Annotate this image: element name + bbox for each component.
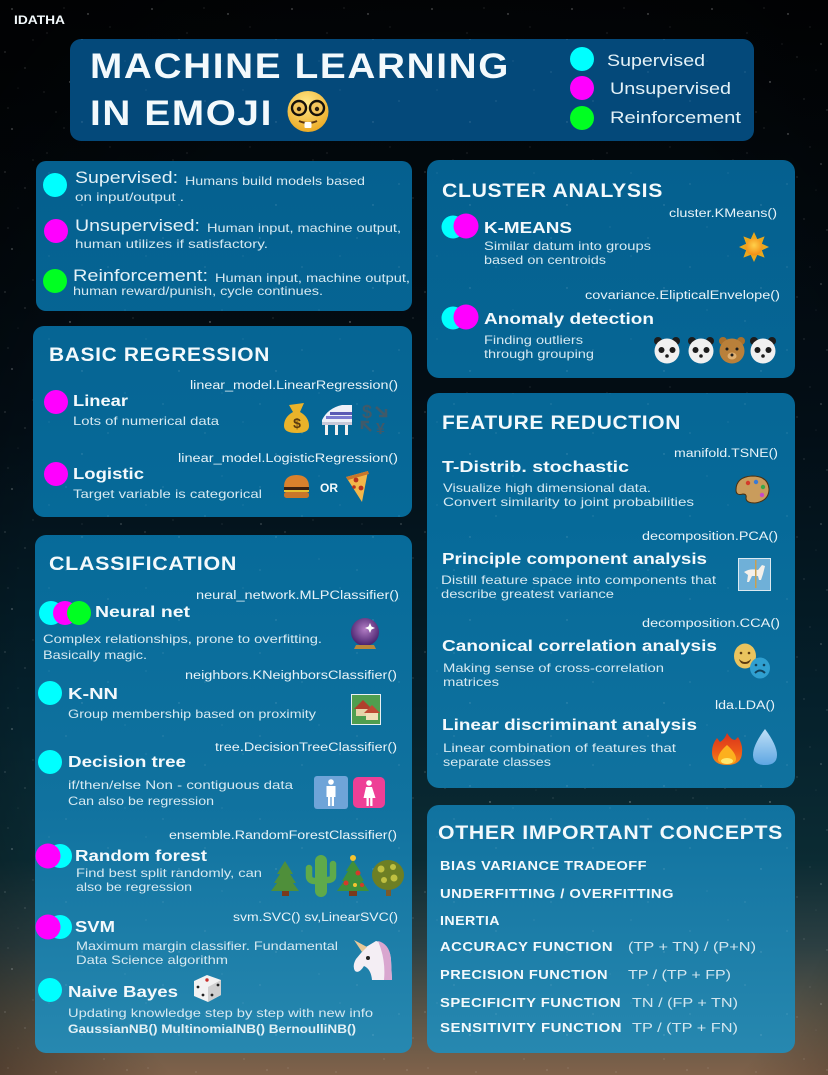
logistic model: linear_model.LogisticRegression() <box>178 453 398 465</box>
or label: OR <box>320 481 338 495</box>
supervised definition: Supervised: <box>75 169 178 187</box>
reinforcement definition: Human input, machine output, <box>215 271 410 285</box>
icon: panda <box>750 337 776 364</box>
icon: man sign <box>314 776 348 809</box>
concept list: SPECIFICITY FUNCTION <box>440 996 621 1010</box>
lda: Linear combination of features that <box>443 741 677 755</box>
lda <box>442 700 775 769</box>
k-nn: K-NN <box>68 686 118 703</box>
icon: nerd face <box>288 91 328 132</box>
icon: currency exchange: ¥ <box>376 421 385 438</box>
decision tree: Decision tree <box>68 754 186 771</box>
icon: fire <box>712 733 742 765</box>
panel: title banner <box>70 39 754 141</box>
panel: basic regression <box>33 326 412 517</box>
panel: feature reduction <box>427 393 795 788</box>
logistic model <box>44 453 398 501</box>
icon: panda <box>688 337 714 364</box>
icon: currency exchange: $ <box>362 402 372 422</box>
linear model: Linear <box>73 393 128 410</box>
decision tree: if/then/else Non - contiguous data <box>68 778 293 792</box>
icon: deciduous tree <box>372 860 404 896</box>
icon: train <box>322 405 352 435</box>
icon: palette <box>736 476 769 503</box>
heading: BASIC REGRESSION <box>49 345 270 366</box>
supervised definition <box>43 169 365 204</box>
panel: learning types <box>36 161 412 311</box>
panel: classification <box>35 535 412 1053</box>
concept list: PRECISION FUNCTION <box>440 968 608 982</box>
random forest: ensemble.RandomForestClassifier() <box>169 830 397 842</box>
pca: Principle component analysis <box>442 551 707 568</box>
concept list: BIAS VARIANCE TRADEOFF <box>440 859 647 873</box>
random forest: Find best split randomly, can <box>76 866 262 880</box>
anomaly detection <box>442 290 780 361</box>
naive bayes: GaussianNB() MultinomialNB() BernoulliNB() <box>68 1022 356 1036</box>
lda: lda.LDA() <box>715 700 775 712</box>
logistic model: Target variable is categorical <box>73 487 262 501</box>
concept list: TP / (TP + FN) <box>632 1020 738 1035</box>
icon: pizza <box>346 471 369 502</box>
decision tree: tree.DecisionTreeClassifier() <box>215 742 397 754</box>
anomaly detection: Anomaly detection <box>484 311 654 328</box>
heading: CLASSIFICATION <box>49 554 237 575</box>
neural net: Complex relationships, prone to overfitting. <box>43 632 322 646</box>
unsupervised definition: Unsupervised: <box>75 217 200 235</box>
lda: separate classes <box>443 755 551 769</box>
lda: Linear discriminant analysis <box>442 717 697 734</box>
naive bayes: Updating knowledge step by step with new info <box>68 1006 373 1020</box>
k-nn <box>38 670 397 721</box>
icon: unicorn <box>354 940 392 980</box>
k-means: K-MEANS <box>484 220 572 237</box>
pca: Distill feature space into components that <box>441 573 717 587</box>
icon: carousel horse <box>738 558 770 590</box>
icon: houses <box>352 694 380 724</box>
legend: Reinforcement <box>610 109 741 127</box>
k-means <box>442 208 777 267</box>
linear model: linear_model.LinearRegression() <box>190 380 398 392</box>
svm: svm.SVC() sv,LinearSVC() <box>233 912 398 924</box>
neural net <box>39 590 399 662</box>
linear model: Lots of numerical data <box>73 414 219 428</box>
k-means: Similar datum into groups <box>484 239 651 253</box>
reinforcement definition <box>43 267 410 298</box>
supervised definition: Humans build models based <box>185 174 365 188</box>
concept list: INERTIA <box>440 914 500 928</box>
icon: currency exchange <box>362 402 386 438</box>
neural net: Neural net <box>95 604 191 621</box>
neural net: Basically magic. <box>43 648 147 662</box>
t-sne: Visualize high dimensional data. <box>443 481 651 495</box>
svm: Data Science algorithm <box>76 953 228 967</box>
random forest: also be regression <box>76 880 192 894</box>
concept list <box>440 859 756 1035</box>
icon: burger <box>284 475 309 498</box>
random forest: Random forest <box>75 848 208 865</box>
icon: bear <box>719 337 745 364</box>
anomaly detection: through grouping <box>484 347 594 361</box>
icon: money bag <box>284 403 309 433</box>
icon: panda <box>654 337 680 364</box>
legend: Supervised <box>607 52 705 70</box>
legend: Unsupervised <box>610 80 731 98</box>
cca: Canonical correlation analysis <box>442 638 717 655</box>
reinforcement definition: Reinforcement: <box>73 267 208 285</box>
concept list: TN / (FP + TN) <box>632 995 738 1010</box>
panel: cluster analysis <box>427 160 795 378</box>
icon: woman sign <box>353 777 385 808</box>
reinforcement definition: human reward/punish, cycle continues. <box>73 284 323 298</box>
logistic model: Logistic <box>73 466 144 483</box>
t-sne: Convert similarity to joint probabilities <box>443 495 694 509</box>
decision tree <box>38 742 397 808</box>
supervised definition: on input/output . <box>75 190 184 204</box>
icon: water drop <box>753 729 777 765</box>
unsupervised definition: human utilizes if satisfactory. <box>75 237 268 251</box>
icon: christmas tree <box>337 855 369 896</box>
t-sne <box>442 448 778 509</box>
legend <box>570 47 741 130</box>
naive bayes: Naive Bayes <box>68 984 178 1001</box>
concept list: ACCURACY FUNCTION <box>440 940 613 954</box>
concept list: SENSITIVITY FUNCTION <box>440 1021 622 1035</box>
icon: money bag: $ <box>293 415 301 431</box>
pca: decomposition.PCA() <box>642 531 778 543</box>
heading: CLUSTER ANALYSIS <box>442 181 663 202</box>
icon: dice <box>194 975 221 1002</box>
icon: theatre masks <box>734 644 770 678</box>
random forest <box>36 830 397 894</box>
concept list: UNDERFITTING / OVERFITTING <box>440 887 674 901</box>
pca: describe greatest variance <box>441 587 614 601</box>
svm: SVM <box>75 919 115 936</box>
cca: decomposition.CCA() <box>642 618 780 630</box>
title: IN EMOJI <box>90 94 273 133</box>
panel: other important concepts <box>427 805 795 1053</box>
unsupervised definition: Human input, machine output, <box>207 221 401 235</box>
cca: matrices <box>443 675 499 689</box>
cca: Making sense of cross-correlation <box>443 661 664 675</box>
linear model <box>44 380 398 428</box>
decision tree: Can also be regression <box>68 794 214 808</box>
heading: FEATURE REDUCTION <box>442 413 681 434</box>
title: MACHINE LEARNING <box>90 47 510 86</box>
anomaly detection: Finding outliers <box>484 333 583 347</box>
brand label: IDATHA <box>14 13 65 27</box>
naive bayes <box>38 978 373 1036</box>
t-sne: T-Distrib. stochastic <box>442 459 629 476</box>
concept list: TP / (TP + FP) <box>628 967 731 982</box>
concept list: (TP + TN) / (P+N) <box>628 939 756 954</box>
k-nn: neighbors.KNeighborsClassifier() <box>185 670 397 682</box>
icon: crystal ball <box>351 618 379 649</box>
cca <box>442 618 780 689</box>
anomaly detection: covariance.ElipticalEnvelope() <box>585 290 780 302</box>
neural net: neural_network.MLPClassifier() <box>196 590 399 602</box>
svm: Maximum margin classifier. Fundamental <box>76 939 338 953</box>
title <box>90 47 510 133</box>
k-nn: Group membership based on proximity <box>68 707 316 721</box>
k-means: cluster.KMeans() <box>669 208 777 220</box>
unsupervised definition <box>44 217 401 251</box>
k-means: based on centroids <box>484 253 606 267</box>
svm <box>36 912 398 967</box>
heading: OTHER IMPORTANT CONCEPTS <box>438 823 783 844</box>
icon: pine tree <box>271 861 299 896</box>
icon: sun <box>739 232 769 262</box>
pca <box>441 531 778 601</box>
t-sne: manifold.TSNE() <box>674 448 778 460</box>
icon: cactus <box>309 855 333 897</box>
